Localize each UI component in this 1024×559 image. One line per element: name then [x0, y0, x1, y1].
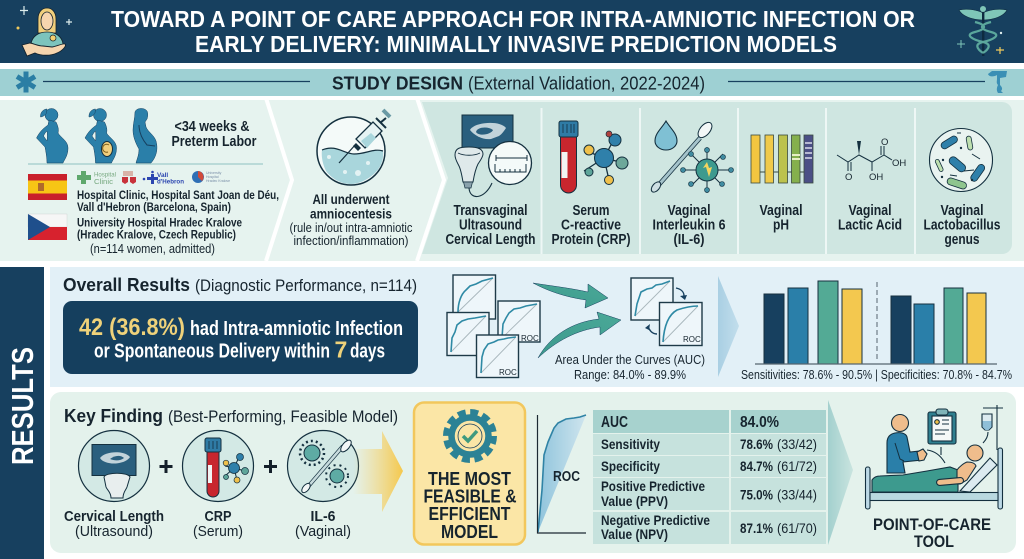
- backrest: [960, 458, 997, 492]
- icon: caduceus: [957, 6, 1007, 56]
- callout: most feasible model: [414, 402, 525, 544]
- callout: 42 had infection: had Intra-amniotic Infection: [190, 318, 403, 340]
- label: IL-6: [652, 203, 726, 248]
- icon: blood tube and protein: [559, 121, 628, 193]
- card 4: [476, 335, 518, 378]
- heading: study design: [332, 72, 705, 94]
- icon: flag of Spain: [28, 174, 67, 200]
- card 2: [447, 312, 489, 356]
- title: TOWARD A POINT OF CARE APPROACH FOR INTRA-AMNIOTIC INFECTION OR: [111, 6, 915, 32]
- predictor: cervical length: [446, 115, 536, 248]
- heading: overall results: [63, 274, 417, 295]
- text: inclusion criteria: <34 weeks &: [174, 119, 250, 135]
- table: model performance: AUC: [601, 414, 628, 431]
- table: model performance: (33/42): [777, 437, 817, 452]
- text: AUC range: [555, 352, 705, 382]
- icon: IL-6 circle: [288, 430, 358, 502]
- heading: overall results: Overall Results: [63, 274, 190, 295]
- heading: key finding: Key Finding: [64, 405, 163, 426]
- callout: 42 had infection: 42 (36.8%): [79, 314, 185, 341]
- label: cervical length: [64, 509, 164, 540]
- table: model performance: [593, 410, 826, 544]
- icon: cervical length circle: [78, 430, 150, 502]
- icon: hospital logos: Hradec Kralove: [206, 179, 230, 183]
- label: lactic acid: [838, 203, 902, 234]
- text: point-of-care tool: TOOL: [914, 532, 954, 551]
- text: amniocentesis: amniocentesis: [310, 206, 392, 222]
- label: cervical length: Cervical Length: [64, 509, 164, 525]
- label: IL-6: [295, 509, 351, 540]
- panel: overall results: [50, 267, 1024, 387]
- table: model performance: (61/70): [777, 521, 817, 536]
- label: CRP: Protein (CRP): [552, 232, 631, 248]
- icon: bacteria in petri dish: [930, 128, 992, 192]
- arrow: top: [533, 283, 608, 308]
- study design band: [0, 69, 1024, 96]
- predictor: lactobacillus: [924, 128, 1000, 248]
- icon: hospital logos: [77, 171, 230, 186]
- label: cervical length: Ultrasound: [459, 218, 522, 234]
- arrow: chevron to bar chart: [718, 276, 739, 377]
- icon: lactic acid structure: O: [845, 172, 852, 183]
- icon: drop, swab and virus: [649, 120, 734, 194]
- text: amniocentesis: (rule in/out intra-amniotic: [290, 221, 412, 235]
- callout: 42 had infection: or Spontaneous Delivery within: [94, 340, 330, 362]
- title: [111, 6, 915, 57]
- plus sign: [160, 460, 172, 473]
- icon: hospital logos: Vall: [157, 172, 168, 179]
- text: hospitals: [77, 188, 279, 256]
- predictor: IL-6: [649, 120, 734, 248]
- text: hospitals: Hospital Clinic, Hospital Sant Joan de Déu,: [77, 188, 279, 202]
- text: the most feasible & efficient model: [424, 469, 516, 542]
- icon: CRP circle: [182, 430, 254, 502]
- chart: combined ROC cards: [631, 278, 702, 346]
- text: point-of-care tool: [873, 515, 991, 551]
- label: lactobacillus: [924, 203, 1000, 248]
- iv pole and bag: [983, 405, 1003, 450]
- table: model performance: (61/72): [777, 459, 817, 474]
- text: hospitals: Vall d'Hebron (Barcelona, Spain): [77, 200, 231, 214]
- panel: amniocentesis: [290, 110, 412, 248]
- icon: lactic acid structure: OH: [869, 172, 883, 183]
- table: model performance: Negative Predictive: [601, 512, 710, 528]
- callout: 42 had infection: days: [350, 340, 385, 362]
- table: model performance: Specificity: [601, 458, 660, 474]
- text: AUC range: Range: 84.0% - 89.9%: [574, 367, 686, 382]
- heading: key finding: [64, 405, 398, 426]
- label: lactobacillus: Vaginal: [940, 203, 984, 219]
- text: amniocentesis: infection/inflammation): [294, 234, 408, 248]
- callout: 42 had infection: [63, 301, 418, 374]
- label: CRP: Serum: [572, 203, 610, 219]
- header banner: [0, 0, 1024, 63]
- label: cervical length: Cervical Length: [446, 232, 536, 248]
- text: point-of-care tool: POINT-OF-CARE: [873, 515, 991, 534]
- icon: hospital logos: Hospital: [94, 172, 116, 178]
- label: cervical length: (Ultrasound): [75, 524, 153, 540]
- label: IL-6: (Vaginal): [295, 524, 351, 540]
- chart: model ROC curve: [538, 415, 586, 533]
- predictor: lactic acid: [837, 137, 906, 234]
- panel: predictors: [446, 115, 1000, 248]
- callout: 42 had infection: 7: [334, 336, 347, 362]
- panel: key finding: [50, 392, 1016, 553]
- panel: study design background: [0, 100, 1024, 261]
- icon: hospital logos: Hospital: [206, 175, 219, 179]
- icon: pregnant silhouettes: [36, 108, 157, 163]
- table: model performance: 87.1%: [740, 521, 773, 536]
- label: CRP: (Serum): [193, 524, 243, 540]
- panel: tests background: [422, 102, 1012, 254]
- heading: key finding: (Best-Performing, Feasible Model): [168, 408, 398, 426]
- icon: gear with check: [446, 412, 494, 460]
- label: lactic acid: Lactic Acid: [838, 218, 902, 234]
- label: cervical length: Transvaginal: [454, 203, 528, 219]
- text: AUC range: Area Under the Curves (AUC): [555, 352, 705, 367]
- table: model performance: 84.7%: [740, 459, 773, 474]
- icon: flag of Czech Republic: [28, 214, 67, 240]
- icon: star of life: [17, 72, 35, 92]
- text: the most feasible & efficient model: MODEL: [441, 522, 498, 542]
- text: hospitals: (n=114 women, admitted): [90, 242, 215, 256]
- label: IL-6: (IL-6): [674, 232, 705, 248]
- sidebar: results: [0, 267, 44, 559]
- label: CRP: C-reactive: [561, 218, 621, 234]
- table: model performance: Positive Predictive: [601, 478, 705, 494]
- table: model performance: 78.6%: [740, 437, 773, 452]
- chart: stacked ROC curve cards: [447, 275, 540, 378]
- chart: combined ROC cards: ROC: [683, 335, 701, 344]
- label: lactic acid: Vaginal: [848, 203, 892, 219]
- card 1: [453, 275, 496, 319]
- label: pH: pH: [773, 218, 789, 234]
- label: IL-6: IL-6: [310, 509, 336, 525]
- table: model performance: 75.0%: [740, 488, 773, 502]
- icon: pH strips: [751, 135, 813, 183]
- icon: clinician and patient bed: [866, 405, 1003, 509]
- bar chart: sensitivities and specificities: [741, 281, 1012, 382]
- heading: study design: STUDY DESIGN: [332, 72, 463, 94]
- text: inclusion criteria: [172, 119, 257, 150]
- icon: hospital logos: University: [206, 171, 222, 175]
- table: model performance: (33/44): [777, 488, 817, 502]
- icon: lactic acid structure: [837, 137, 906, 183]
- text: inclusion criteria: Preterm Labor: [172, 134, 257, 150]
- arrow: chevron to point of care: [828, 400, 853, 545]
- text: the most feasible & efficient model: EFFICIENT: [428, 504, 511, 524]
- arrow: bottom: [538, 312, 621, 358]
- predictor: pH: [751, 135, 813, 234]
- chart: model ROC curve: ROC: [553, 469, 580, 485]
- panel: population: [28, 108, 279, 256]
- icon: small caduceus: [988, 71, 1007, 93]
- icon: lactic acid structure: O: [881, 137, 888, 148]
- plus sign: [264, 460, 277, 473]
- text: the most feasible & efficient model: FEASIBLE &: [424, 486, 516, 506]
- blanket: [872, 467, 958, 492]
- card 3: [498, 301, 540, 342]
- patient: [967, 445, 983, 461]
- icon: hospital logos: d'Hebron: [157, 180, 184, 186]
- icon: lactic acid structure: OH: [892, 158, 906, 169]
- icon: syringe in amniotic fluid: [317, 110, 390, 185]
- table: model performance: Value (NPV): [601, 526, 668, 542]
- label: IL-6: Interleukin 6: [652, 218, 726, 234]
- sidebar: results: RESULTS: [5, 347, 40, 465]
- label: pH: Vaginal: [760, 203, 802, 219]
- clinician: [892, 414, 908, 432]
- clipboard: [928, 412, 956, 444]
- label: CRP: CRP: [204, 509, 232, 525]
- heading: study design: (External Validation, 2022-2024): [468, 72, 705, 94]
- label: IL-6: Vaginal: [668, 203, 710, 219]
- text: hospitals: (Hradec Kralove, Czech Republic): [77, 228, 236, 242]
- table: model performance: Value (PPV): [601, 493, 668, 509]
- label: lactobacillus: Lactobacillus: [924, 218, 1000, 234]
- predictor: CRP: [552, 121, 631, 248]
- icon: hospital logos: Clinic: [94, 179, 114, 186]
- table: model performance: Sensitivity: [601, 436, 660, 452]
- text: the most feasible & efficient model: THE MOST: [428, 469, 511, 489]
- arrow: yellow to model: [353, 431, 403, 512]
- bed: [866, 467, 870, 509]
- label: CRP: [552, 203, 631, 248]
- title: EARLY DELIVERY: MINIMALLY INVASIVE PREDICTION MODELS: [195, 31, 837, 57]
- chart: stacked ROC curve cards: ROC: [499, 368, 517, 377]
- text: amniocentesis: All underwent: [312, 191, 390, 207]
- text: amniocentesis: [290, 191, 412, 248]
- label: cervical length: [446, 203, 536, 248]
- chart: stacked ROC curve cards: ROC: [521, 334, 539, 343]
- heading: overall results: (Diagnostic Performance, n=114): [195, 277, 417, 295]
- icon: nurse on caring hand: [16, 6, 72, 56]
- table: model performance: 84.0%: [740, 414, 779, 431]
- text: hospitals: University Hospital Hradec Kralove: [77, 216, 242, 230]
- label: CRP: [193, 509, 243, 540]
- label: lactobacillus: genus: [944, 232, 980, 248]
- icon: ultrasound and ruler: [455, 115, 532, 197]
- label: pH: [760, 203, 802, 234]
